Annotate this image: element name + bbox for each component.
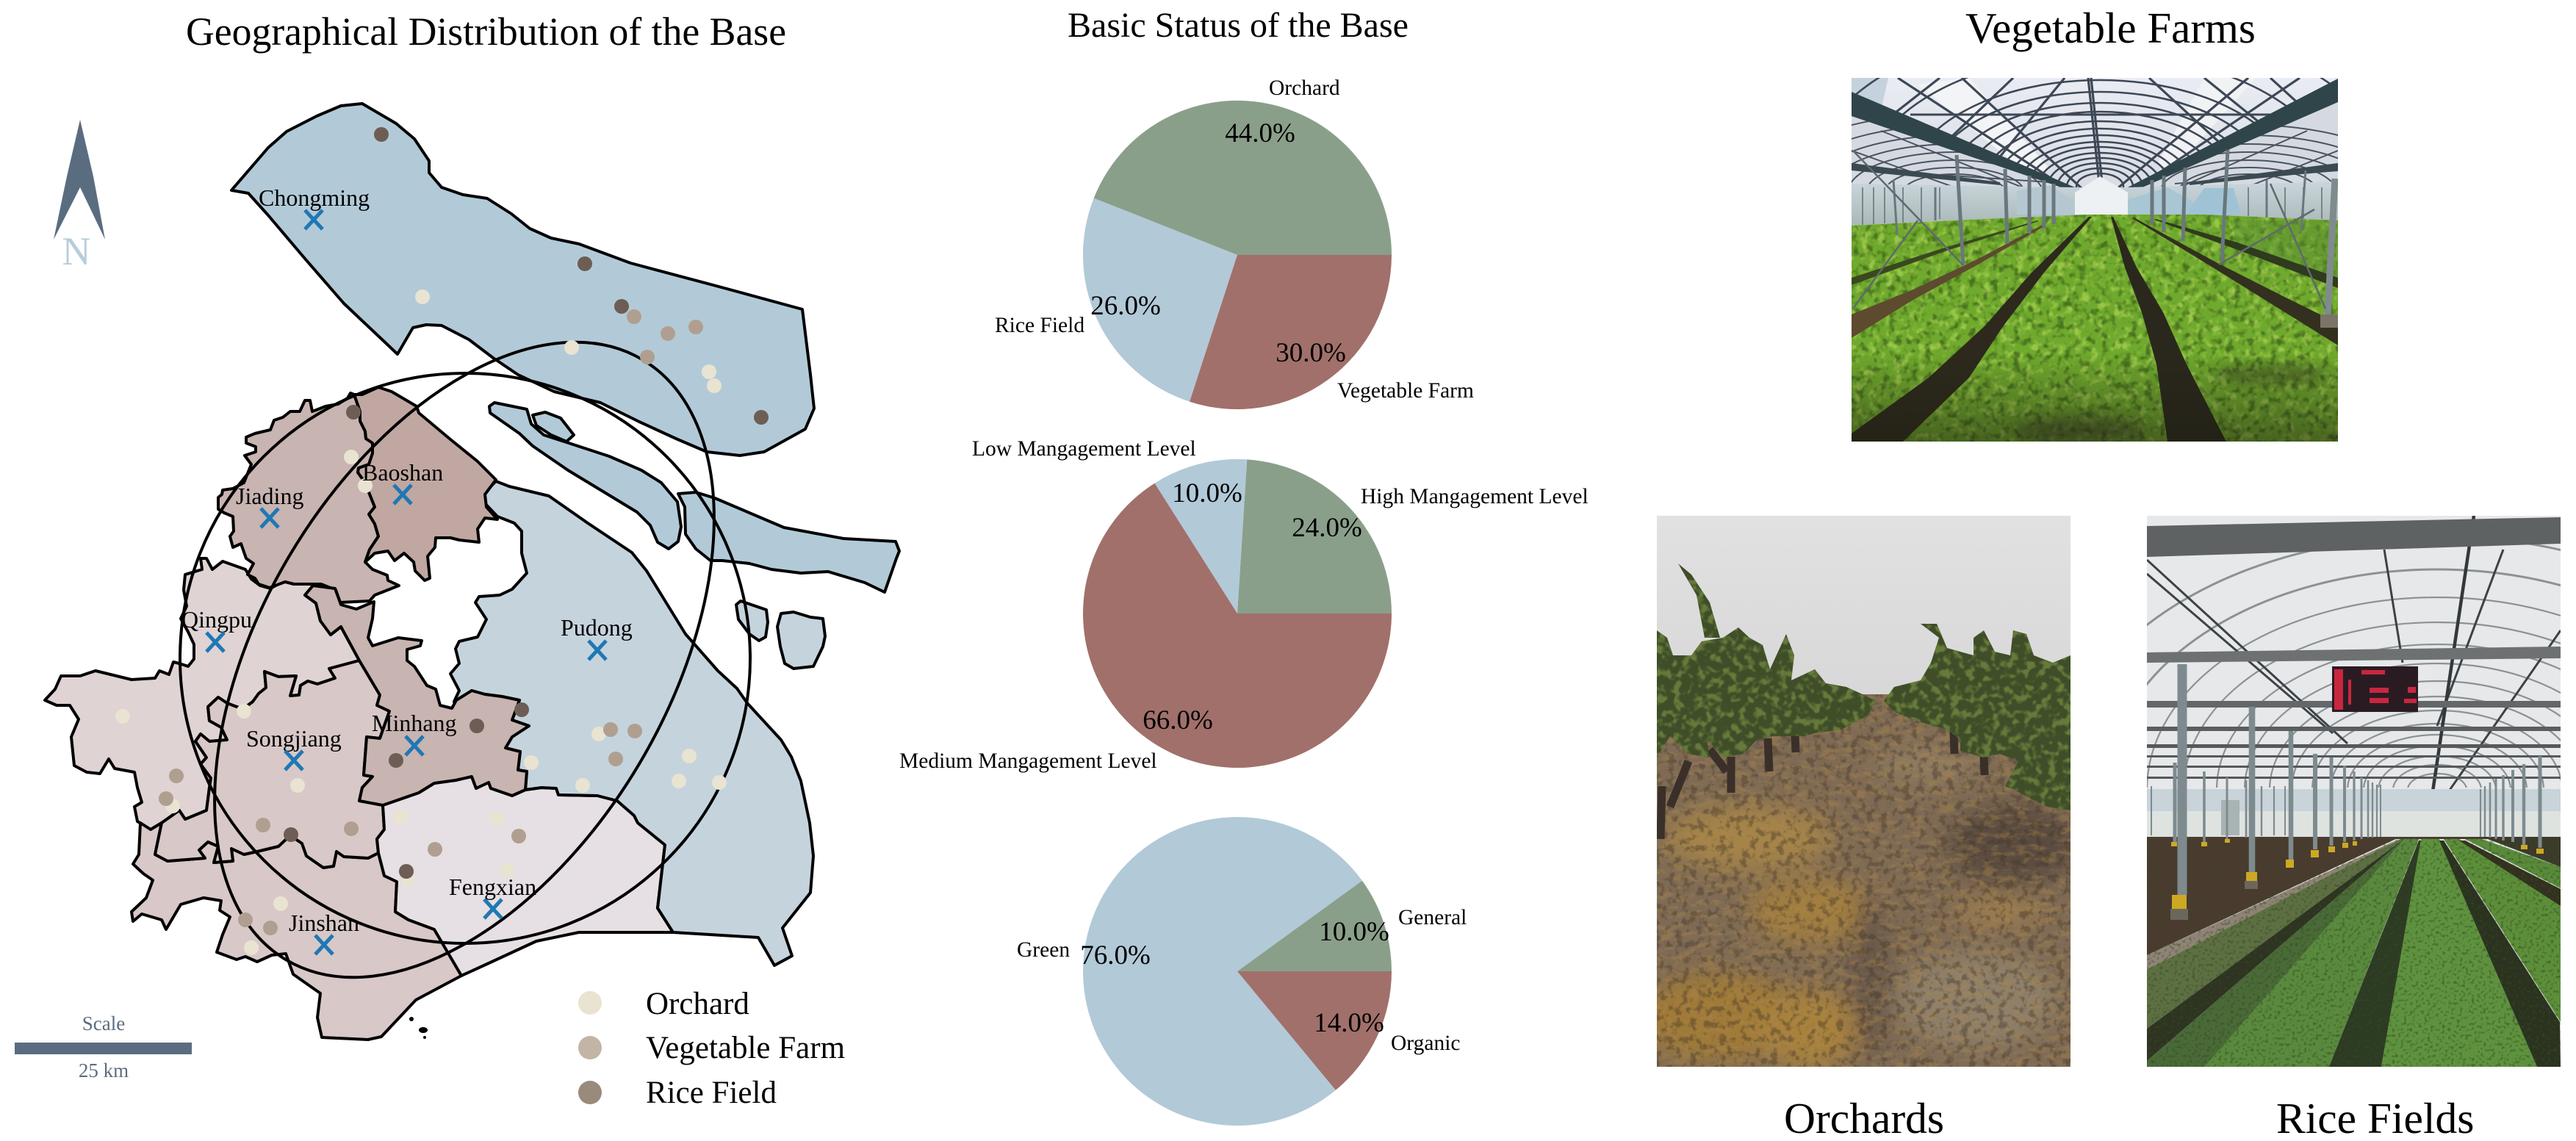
island: Changxing bbox=[489, 403, 681, 549]
label: Minhang bbox=[372, 710, 457, 755]
label: Minhang: Minhang bbox=[372, 710, 457, 736]
pie chart: management level: 10.0% bbox=[1172, 478, 1242, 508]
legend: Orchard bbox=[646, 987, 749, 1021]
photo detail: LED display panel bbox=[2332, 666, 2418, 712]
photo: vegetable farm greenhouse bbox=[1852, 78, 2338, 442]
pie chart: certification type bbox=[1017, 817, 1467, 1126]
title: basic status: Basic Status of the Base bbox=[1068, 6, 1408, 45]
district: Baoshan bbox=[354, 387, 497, 580]
label: Baoshan: Baoshan bbox=[362, 459, 443, 486]
pie chart: management level: Low Mangagement Level bbox=[972, 437, 1196, 461]
legend: Rice Field bbox=[646, 1076, 777, 1110]
island: small islet bbox=[533, 412, 574, 442]
label: Jinshan: Jinshan bbox=[289, 910, 359, 936]
district: Fengxian bbox=[377, 777, 673, 976]
pie chart: certification type: 76.0% bbox=[1080, 940, 1151, 971]
pie chart: land use type: 30.0% bbox=[1276, 338, 1346, 368]
label: Fengxian bbox=[449, 874, 536, 918]
icon: north arrow bbox=[54, 120, 105, 273]
pie chart: certification type: 10.0% bbox=[1319, 917, 1389, 947]
district: Qingpu bbox=[45, 558, 359, 829]
island: Hengsha bbox=[678, 492, 899, 592]
pie chart: land use type: 26.0% bbox=[1090, 291, 1161, 321]
district labels and markers bbox=[181, 184, 633, 954]
scale bar: 25 km bbox=[79, 1059, 129, 1081]
label: Pudong: Pudong bbox=[561, 614, 633, 641]
label: Chongming bbox=[259, 184, 370, 229]
pie chart: land use type: Vegetable Farm bbox=[1337, 379, 1474, 403]
district: Chongming bbox=[231, 104, 814, 456]
district: Songjiang bbox=[155, 661, 389, 868]
panel: geographical distribution map bbox=[15, 10, 899, 1110]
label: Qingpu: Qingpu bbox=[181, 606, 252, 633]
map overlay: circular service ranges bbox=[111, 256, 818, 1064]
pie chart: land use type bbox=[995, 76, 1474, 409]
pie chart: certification type: Organic bbox=[1391, 1032, 1460, 1055]
photo: rice field greenhouse bbox=[2147, 516, 2561, 1067]
pie chart: land use type: Orchard bbox=[1269, 76, 1340, 100]
pie chart: management level: 66.0% bbox=[1143, 705, 1213, 735]
legend: Vegetable Farm bbox=[646, 1031, 845, 1065]
legend bbox=[578, 987, 845, 1110]
pie chart: certification type: General bbox=[1398, 906, 1467, 929]
label: Songjiang: Songjiang bbox=[246, 725, 342, 752]
title: geographical distribution: Geographical Distribution of the Base bbox=[186, 10, 786, 54]
label: Jinshan bbox=[289, 910, 359, 954]
label: Baoshan bbox=[362, 459, 443, 504]
photo: orchard bbox=[1638, 516, 2079, 1069]
label: Chongming: Chongming bbox=[259, 184, 370, 211]
label: Songjiang bbox=[246, 725, 342, 770]
map: districts of Shanghai bbox=[45, 104, 899, 1040]
pie chart: land use type: 44.0% bbox=[1225, 118, 1295, 148]
pie chart: land use type: Rice Field bbox=[995, 314, 1084, 337]
island: east islet two bbox=[777, 612, 825, 669]
label: Pudong bbox=[561, 614, 633, 660]
panel: field photographs bbox=[1638, 4, 2576, 1141]
label: Jiading bbox=[236, 483, 303, 528]
label: Jiading: Jiading bbox=[236, 483, 303, 509]
district: Minhang bbox=[305, 586, 529, 805]
label: Fengxian: Fengxian bbox=[449, 874, 536, 900]
district: Jinshan bbox=[132, 823, 461, 1040]
icon: north arrow: N bbox=[62, 229, 91, 273]
pie chart: management level bbox=[899, 437, 1589, 773]
heading: vegetable farms: Vegetable Farms bbox=[1965, 4, 2256, 52]
pie chart: certification type: 14.0% bbox=[1314, 1008, 1384, 1038]
label: Qingpu bbox=[181, 606, 252, 652]
panel: basic status pie charts bbox=[899, 6, 1589, 1126]
district: Jiading bbox=[218, 393, 399, 602]
data points: base locations bbox=[115, 127, 769, 955]
pie chart: management level: High Mangagement Level bbox=[1361, 485, 1589, 508]
island: east islet one bbox=[736, 601, 768, 641]
pie chart: management level: Medium Mangagement Level bbox=[899, 749, 1157, 773]
islets: south coast bbox=[409, 1017, 428, 1039]
pie chart: certification type: Green bbox=[1017, 938, 1070, 962]
pie chart: management level: 24.0% bbox=[1292, 513, 1362, 543]
district: Pudong bbox=[450, 481, 813, 965]
scale bar bbox=[15, 1012, 192, 1081]
scale bar: Scale bbox=[82, 1012, 125, 1034]
